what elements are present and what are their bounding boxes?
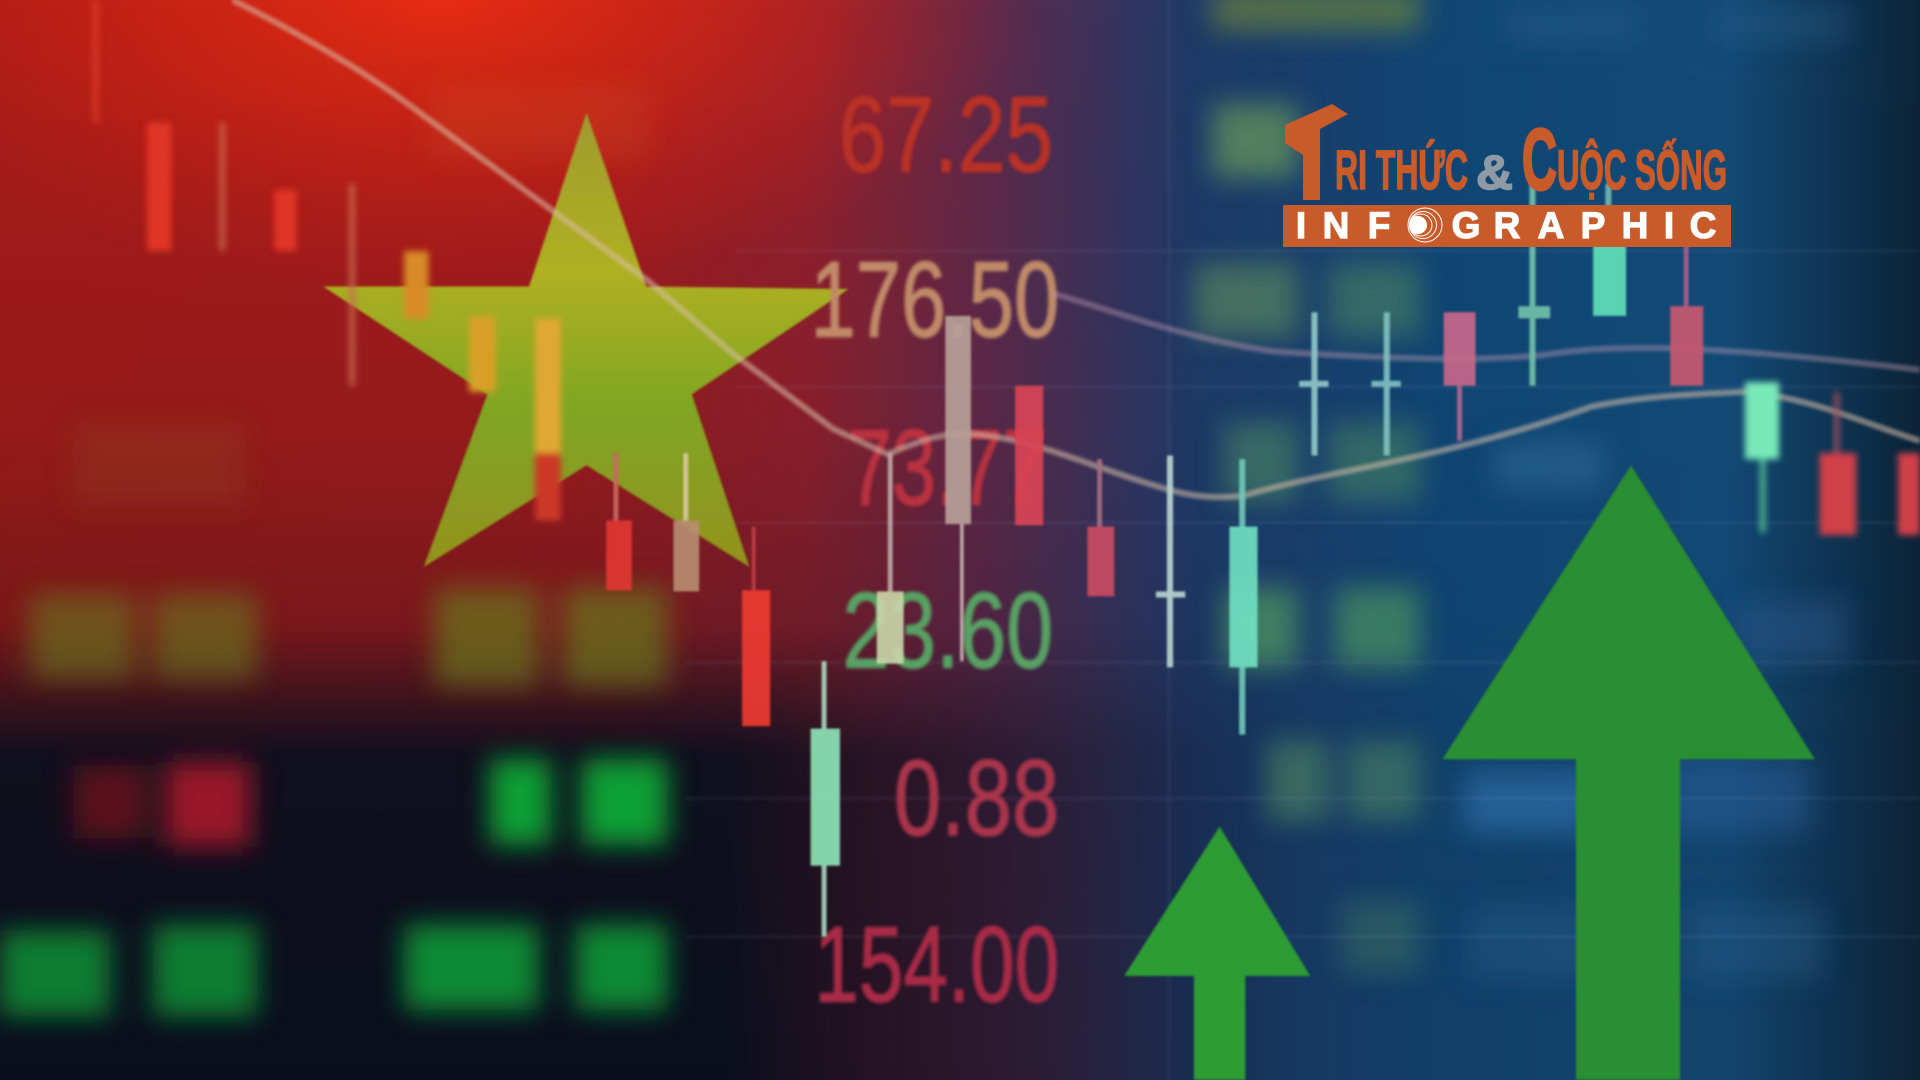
logo infographic text: I (1664, 205, 1674, 246)
market numbers: 176.50 (811, 239, 1059, 360)
logo infographic text: R (1494, 205, 1520, 246)
market numbers: 154.00 (814, 904, 1059, 1025)
candlestick chart (606, 184, 1703, 937)
logo infographic text: H (1622, 205, 1648, 246)
logo infographic text (1296, 205, 1716, 246)
logo wordmark: UỘC SỐNG (1557, 138, 1727, 201)
logo infographic text: P (1581, 205, 1605, 246)
logo infographic text: A (1538, 205, 1564, 246)
logo wordmark: RI THỨC (1335, 138, 1468, 201)
arrow: large green up (1442, 465, 1815, 1080)
arrow: small green up (1124, 827, 1310, 1080)
logo infographic bar (1283, 205, 1731, 247)
logo wordmark: & (1476, 147, 1513, 200)
logo wordmark (1335, 112, 1727, 208)
market numbers: 0.88 (894, 737, 1059, 858)
grid lines (686, 0, 1920, 1080)
market numbers: 67.25 (839, 73, 1053, 194)
blurred right candles (1745, 382, 1920, 535)
market numbers: 23.60 (842, 569, 1053, 690)
red glow (0, 0, 1029, 294)
blurred left candles (92, 0, 561, 520)
trend line (233, 0, 1920, 497)
second trend line (1053, 294, 1920, 370)
market numbers (811, 73, 1059, 1025)
vietnam flag star (323, 113, 849, 567)
logo T mark (1285, 104, 1348, 200)
logo infographic text: I (1296, 205, 1306, 246)
logo infographic text: G (1452, 205, 1480, 246)
logo infographic text: N (1323, 205, 1349, 246)
market numbers: 73.77 (847, 406, 1047, 527)
logo infographic text: C (1690, 205, 1716, 246)
logo wordmark: C (1522, 112, 1557, 208)
logo infographic text: F (1368, 205, 1390, 246)
logo globe icon (1408, 208, 1442, 242)
logo: Tri thuc & Cuoc song Infographic (1283, 104, 1731, 247)
bottom dark fade (0, 148, 1703, 1080)
